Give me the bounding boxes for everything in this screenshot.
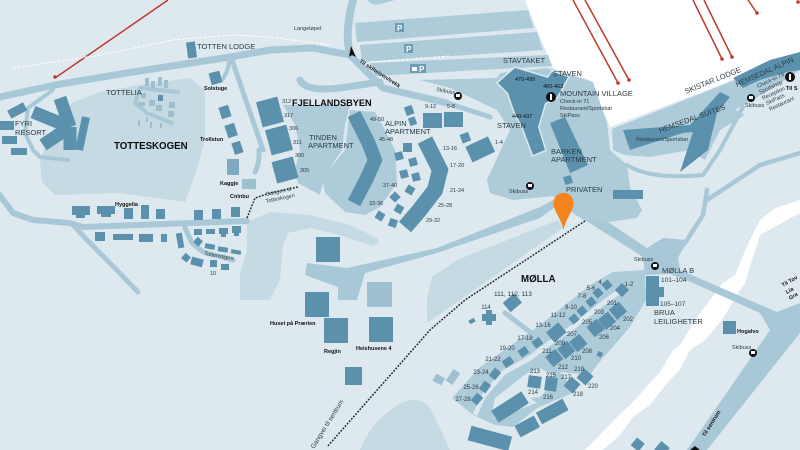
place labels: Hogalvo	[737, 329, 759, 335]
place labels: Restaurant/Sportsbar	[636, 137, 688, 143]
place labels: Skibuss	[732, 345, 752, 351]
place labels: 25-26	[463, 385, 479, 391]
place labels: Til skiheisen/trekk	[358, 59, 402, 90]
place labels: 300	[295, 153, 304, 159]
place labels: 305	[300, 168, 309, 174]
area: Alpin	[322, 110, 397, 215]
place labels: 217	[561, 375, 572, 381]
place labels: HEMSEDAL ALPIN	[734, 55, 795, 89]
bus parking sign	[410, 64, 426, 74]
area: Hemsedal suites ground	[612, 52, 800, 160]
area: forest by Mølla	[427, 220, 563, 323]
place labels: APARTMENT	[308, 141, 354, 150]
place labels: 210	[571, 356, 582, 362]
dotted walkway to centre	[327, 221, 585, 447]
place labels: 23-24	[473, 370, 489, 376]
place labels: Skibuss	[436, 87, 456, 96]
parking sign: P	[406, 45, 412, 54]
place labels: RESORT	[15, 128, 47, 137]
place labels: 37-40	[383, 183, 397, 189]
area: Fjellandsbyen Tinden	[283, 105, 350, 195]
parking areas	[355, 0, 552, 76]
buildings: Barken and Privaten	[550, 117, 643, 199]
place labels: APARTMENT	[551, 155, 597, 164]
buildings: Mountain Village	[498, 68, 568, 155]
place labels: 13-16	[535, 323, 551, 329]
place labels: 460-463	[543, 84, 563, 90]
place labels: FYRI	[15, 119, 32, 128]
place labels: BARKEN	[551, 147, 582, 156]
place labels: 29-32	[426, 218, 440, 224]
place labels: Gangvei til	[265, 187, 292, 198]
place labels: 9-10	[565, 305, 578, 311]
place labels: ALPIN	[385, 119, 407, 128]
road: junction and road to sentrum	[585, 220, 800, 450]
dotted walkway to Totteskogen	[247, 187, 298, 218]
place labels: 440-437	[512, 114, 532, 120]
place labels: 1-2	[625, 282, 634, 288]
place labels: MOUNTAIN VILLAGE	[560, 89, 633, 98]
place labels: 101–104	[661, 277, 687, 284]
place labels: 105–107	[660, 301, 686, 308]
place labels: FJELLANDSBYEN	[292, 98, 372, 108]
buildings: Mølla B	[646, 276, 664, 306]
place labels: LEILIGHETER	[654, 317, 703, 326]
place labels: 317	[284, 113, 293, 119]
place labels: 21-22	[485, 357, 501, 363]
place labels: 10	[210, 271, 216, 277]
buildings: Totten lodge	[186, 41, 197, 58]
place labels: 214	[528, 390, 539, 396]
place labels: 111, 112, 113	[494, 291, 532, 298]
place labels: 205	[582, 320, 593, 326]
ski lifts	[53, 0, 800, 85]
place labels: 311	[293, 140, 302, 146]
place labels: 33-36	[369, 201, 383, 207]
path: white ski trail	[13, 35, 450, 68]
place labels: MØLLA B	[662, 266, 694, 275]
place labels: PRIVATEN	[566, 185, 602, 194]
place labels: TOTTEN LODGE	[197, 42, 255, 51]
place labels: APARTMENT	[385, 127, 431, 136]
place labels: Sportshop	[758, 80, 784, 96]
buildings: central lower	[305, 237, 460, 385]
place labels: Restaurant/Sportsbar	[560, 106, 612, 112]
place labels: 216	[543, 395, 554, 401]
area: Totteskogen forest	[40, 78, 205, 202]
bus parking sign: P	[419, 65, 425, 74]
place labels: 25-28	[438, 203, 452, 209]
place labels: 114	[481, 305, 491, 311]
place labels: Til Tov	[781, 274, 800, 289]
buildings: Mølla	[468, 279, 629, 450]
place labels: MØLLA	[521, 274, 555, 285]
area: central plaza	[420, 68, 642, 222]
buildings: Alpin apartment	[354, 105, 495, 228]
place labels: 213	[530, 369, 541, 375]
place labels: 27-28	[455, 397, 471, 403]
place labels: Lia	[785, 286, 796, 296]
place labels: SkiPass	[765, 93, 786, 107]
place labels: Gra	[788, 291, 800, 302]
river	[585, 200, 800, 450]
place labels: 4	[598, 280, 602, 286]
place labels: 209	[555, 341, 566, 347]
place labels: 306	[289, 126, 298, 132]
buildings: Hyggelia row	[72, 205, 241, 270]
place labels: STAVEN	[497, 121, 526, 130]
place labels: 5-6	[587, 286, 596, 292]
place labels: 13-16	[443, 146, 457, 152]
place labels: 203	[594, 310, 605, 316]
parking sign	[404, 44, 413, 54]
buildings: Hemsedal Alpin	[733, 52, 800, 88]
place labels: 1-4	[495, 140, 503, 146]
Mølla path to 111	[505, 313, 530, 332]
place labels: Huset på Prærien	[270, 320, 316, 327]
place labels: 202	[623, 317, 634, 323]
place labels: SKISTAR LODGE	[683, 65, 742, 96]
place labels: Check-in 71	[560, 99, 589, 105]
place labels: STAVTAKET	[503, 56, 546, 65]
place labels: Skibuss	[634, 257, 654, 263]
area: lower forest	[240, 212, 379, 300]
place labels: Check-in 79	[756, 72, 785, 90]
place labels: Kaggje	[220, 181, 238, 187]
place labels: Hyggelia	[115, 202, 139, 208]
icon: direction arrows	[349, 46, 700, 450]
place labels: 211	[542, 349, 552, 355]
place labels: 9-12	[425, 104, 436, 110]
place labels: BRUA	[654, 308, 675, 317]
place labels: 5-8	[447, 104, 455, 110]
place labels: 7-8	[578, 294, 587, 300]
place labels: 215	[546, 373, 557, 379]
place labels: 470-499	[515, 77, 535, 83]
place labels: Skibuss	[509, 189, 529, 195]
buildings: Fjellandsbyen	[256, 97, 298, 183]
place labels: 45-48	[379, 137, 393, 143]
place labels: Til S	[786, 86, 798, 92]
place labels: Solstuge	[204, 86, 227, 92]
parking sign: P	[397, 24, 403, 33]
buildings: Tottelia	[138, 77, 175, 128]
place labels: TOTTESKOGEN	[114, 141, 188, 152]
Mølla inner light patch	[492, 368, 558, 418]
place labels: Cnlnbu	[230, 194, 249, 200]
place labels: 207	[567, 332, 578, 338]
place labels: 17-20	[450, 163, 464, 169]
buildings: Solstuge and Trollstun row	[209, 71, 256, 189]
buildings: Hemsedal suites	[623, 92, 730, 172]
place labels: SkiPass	[560, 113, 580, 119]
icon: check-in keys	[546, 72, 795, 102]
place labels: 17-18	[517, 336, 533, 342]
place labels: 220	[588, 384, 599, 390]
place labels: Trollstun	[200, 137, 224, 143]
place labels: 208	[582, 349, 593, 355]
place labels: 49-50	[370, 117, 384, 123]
place labels: STAVEN	[553, 69, 582, 78]
location pin	[554, 193, 574, 230]
place labels: 201	[607, 301, 618, 307]
buildings: Fyri resort	[0, 98, 86, 155]
place labels: Heishusene 4	[356, 346, 392, 352]
place labels: 219	[574, 367, 585, 373]
place labels: 11-12	[551, 313, 566, 319]
place labels: 212	[558, 365, 569, 371]
place labels: 21-24	[450, 188, 464, 194]
place labels: Til sentrum	[702, 410, 722, 438]
place labels: 19-20	[499, 346, 515, 352]
place labels: Totteskogen	[265, 193, 295, 205]
place labels: HEMSEDAL SUITES	[658, 102, 727, 135]
place labels: 312	[282, 99, 291, 105]
place labels: Restaurant	[768, 96, 796, 113]
Mølla inner street	[475, 288, 625, 415]
place labels: TOTTELIA	[106, 88, 142, 97]
place labels: Regjin	[324, 349, 341, 355]
parking sign	[395, 23, 404, 33]
snow area	[525, 0, 800, 127]
icon: ski bus stops	[454, 92, 757, 357]
place labels: Gangvei til sentrum	[310, 399, 345, 450]
place labels: Reception	[761, 86, 786, 102]
buildings: south-east	[631, 321, 736, 450]
place labels: 218	[573, 392, 584, 398]
place labels: TINDEN	[309, 133, 337, 142]
place labels: Langeløpet	[294, 26, 322, 32]
place labels: Tottenstigen	[204, 251, 234, 262]
place labels: 206	[599, 335, 610, 341]
place labels: Skibuss	[745, 103, 765, 109]
place labels: 204	[610, 326, 621, 332]
area: Mølla ground	[452, 270, 646, 427]
area: bottom forest	[360, 400, 450, 450]
